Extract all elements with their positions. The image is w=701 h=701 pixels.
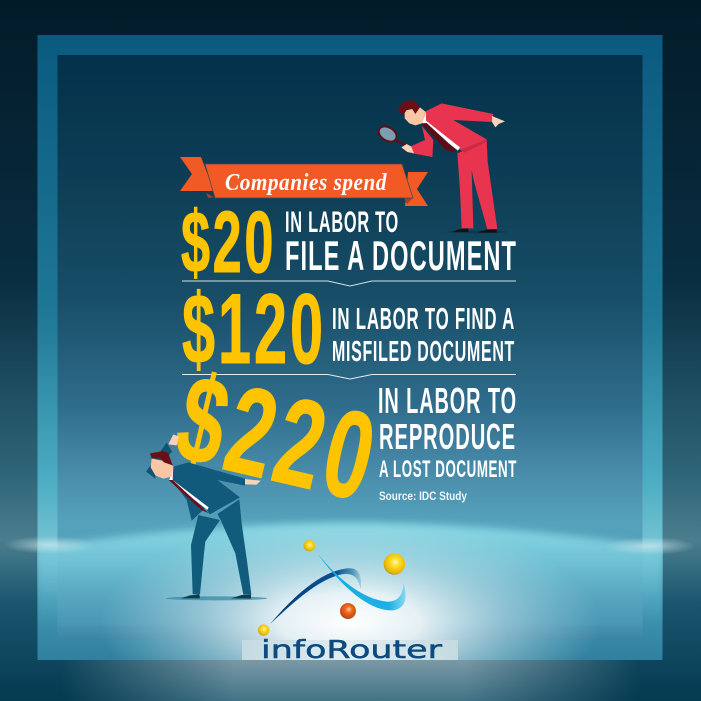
divider 1 <box>182 281 516 286</box>
panel: inner field <box>58 55 642 640</box>
red man far sleeve <box>410 126 433 157</box>
illustration: man in blue carrying number <box>146 434 267 600</box>
ribbon left fold <box>206 193 214 198</box>
logo wordmark: infoRouter <box>261 635 443 664</box>
amount $220 tilted: $220 <box>165 349 391 528</box>
source note: Source: IDC Study <box>379 491 468 503</box>
logo ball top <box>304 540 315 551</box>
stat: $20 <box>181 194 517 291</box>
red man near hand <box>492 116 505 127</box>
horizon band <box>38 523 662 660</box>
blue man jacket <box>172 462 245 521</box>
ribbon text: Companies spend <box>225 170 387 196</box>
divider 2 <box>182 374 516 379</box>
red man hand on magnifier <box>401 144 414 153</box>
ribbon banner <box>180 157 428 206</box>
logo ball bottom <box>258 624 269 636</box>
label: file a document: FILE A DOCUMENT <box>285 232 517 279</box>
blue man raised arm <box>146 443 172 479</box>
ribbon right fold <box>404 198 413 204</box>
red man shadow <box>447 231 507 233</box>
ribbon left tail <box>180 157 214 191</box>
logo dark swoosh <box>270 568 361 624</box>
stat: $220 <box>165 349 517 528</box>
logo ball orange <box>340 603 356 619</box>
panel: outer frame <box>38 35 662 660</box>
red man shirt <box>422 111 460 151</box>
blue man shirt <box>169 466 209 510</box>
blue man raised hand <box>168 434 179 445</box>
logo band gap <box>242 640 458 660</box>
red man shoes <box>451 228 497 233</box>
logo ball large <box>384 553 405 575</box>
horizon light left <box>4 536 96 554</box>
red man jacket <box>422 103 493 152</box>
horizon light right <box>604 537 696 555</box>
label: in labor to find a: IN LABOR TO FIND A <box>332 301 515 336</box>
blue man face <box>151 459 173 479</box>
amount $120: $120 <box>182 273 326 384</box>
label: misfiled document: MISFILED DOCUMENT <box>332 336 515 368</box>
blue man shadow <box>166 596 267 600</box>
stat: $120 <box>182 273 515 384</box>
blue man hair <box>150 451 173 465</box>
central white glow <box>100 517 600 660</box>
label: in labor to: IN LABOR TO <box>378 380 517 421</box>
label: reproduce: REPRODUCE <box>379 416 516 457</box>
bottom light below frame <box>74 660 626 701</box>
red man face <box>405 107 425 125</box>
logo: infoRouter <box>258 540 406 636</box>
red man hair <box>398 100 420 115</box>
blue man trousers <box>191 499 251 595</box>
amount $20: $20 <box>181 194 276 291</box>
label: in labor to: IN LABOR TO <box>285 206 399 239</box>
red man tie <box>421 123 456 153</box>
red man jacket shade <box>460 139 487 153</box>
magnifier handle <box>395 140 408 147</box>
magnifier lens <box>376 123 399 145</box>
ribbon right tail <box>405 172 428 206</box>
blue man tie <box>169 480 209 513</box>
red man trousers <box>457 140 497 229</box>
blue man lower hand <box>245 479 261 485</box>
illustration: man in red with magnifying glass <box>376 100 507 233</box>
label: a lost document: A LOST DOCUMENT <box>379 456 517 483</box>
logo light swoosh <box>317 553 406 610</box>
blue man shoes <box>181 594 251 599</box>
ribbon body <box>205 164 413 198</box>
